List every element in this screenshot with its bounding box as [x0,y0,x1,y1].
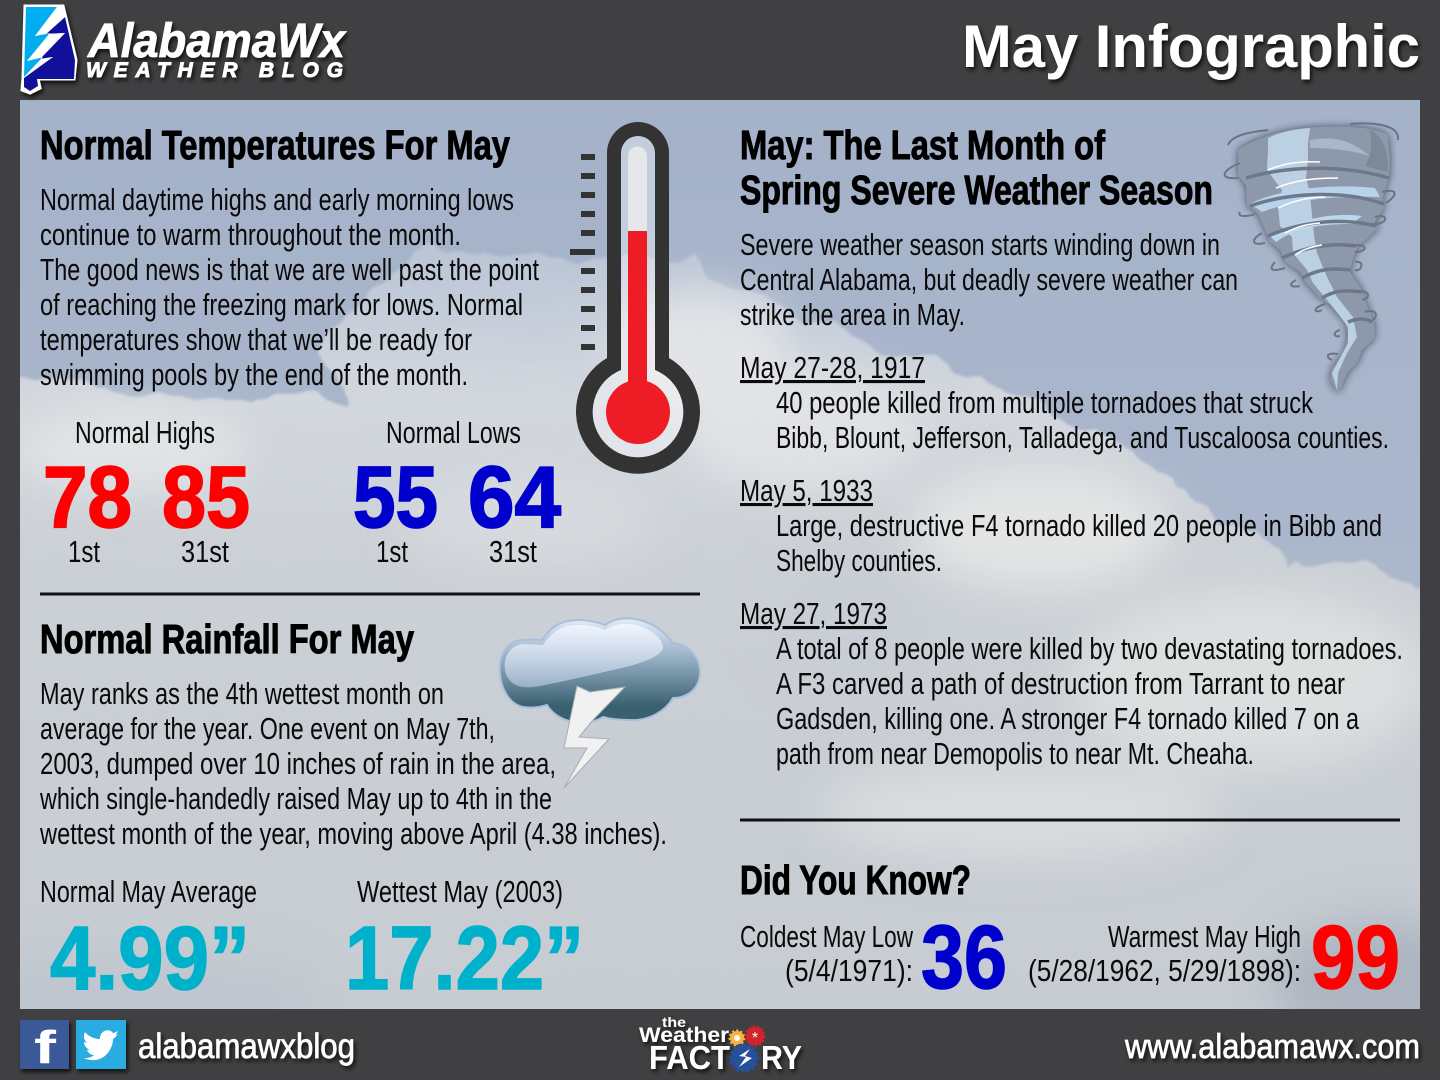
logo: The Weather Factory: FACT [649,1039,730,1076]
text block: rainfall description: 2003, dumped over 10 inches of rain in the area, [40,746,556,781]
stat: normal lows: 1st [376,534,408,569]
stat: normal lows: Normal Lows [386,415,521,450]
logo subtitle: WEATHER BLOG [86,59,343,82]
text block: temperatures description: temperatures show that we’ll be ready for [40,322,472,357]
heading: last month of severe weather season [740,122,1213,213]
stat: normal highs: 1st [68,534,100,569]
stat: normal highs: 85 [162,449,250,546]
heading: last month of severe weather season: May: The Last Month of [740,122,1105,168]
text block: rainfall description: wettest month of the year, moving above April (4.38 inches). [39,816,667,851]
stat: normal May average rainfall [40,874,257,1009]
text block: temperatures description: of reaching the freezing mark for lows. Normal [40,287,523,322]
icon: storm cloud with lightning [500,618,700,788]
text block: temperatures description: Normal daytime highs and early morning lows [40,182,514,217]
icon: twitter [76,1020,126,1069]
stat: normal lows: 31st [489,534,537,569]
icon: sun gear [730,1031,744,1045]
event: May 5, 1933: Shelby counties. [776,543,942,578]
stat: normal highs [43,415,250,569]
event: May 5, 1933: May 5, 1933 [740,473,873,508]
logo: The Weather Factory: the [662,1014,686,1030]
text block: severe weather intro: Severe weather season starts winding down in [740,227,1220,262]
stat: coldest May low: (5/4/1971): [785,953,913,988]
stat: wettest May rainfall [345,874,584,1009]
stat: warmest May high: 99 [1311,908,1400,1008]
title: May Infographic [962,13,1420,80]
stat: normal lows: 64 [468,449,561,546]
stat: normal May average rainfall: 4.99” [50,909,250,1009]
social handle: alabamawxblog [138,1027,355,1066]
stat: warmest May high: (5/28/1962, 5/29/1898): [1028,953,1301,988]
text block: severe weather intro: Central Alabama, but deadly severe weather can [740,262,1238,297]
text block: rainfall description: which single-handedly raised May up to 4th in the [39,781,552,816]
event: May 27-28, 1917 [740,350,1389,455]
logo: AlabamaWx Weather Blog [22,6,347,93]
logo: The Weather Factory [639,1014,802,1076]
stat: normal lows: 55 [353,449,438,546]
icon: lightning gear [731,1045,757,1071]
icon: snow gear [746,1027,764,1047]
stat: coldest May low: 36 [921,908,1007,1008]
text block: rainfall description: average for the year. One event on May 7th, [40,711,495,746]
stat: normal May average rainfall: Normal May Average [40,874,257,909]
icon: tornado [1225,123,1398,392]
text block: temperatures description: continue to warm throughout the month. [40,217,461,252]
heading: did you know: Did You Know? [740,857,971,903]
text block: severe weather intro [740,227,1238,332]
icon: snow gear: * [752,1030,758,1047]
stat: wettest May rainfall: Wettest May (2003) [357,874,563,909]
event: May 27, 1973 [740,596,1403,771]
stat: normal highs: Normal Highs [75,415,215,450]
text block: rainfall description [39,676,667,851]
stat: warmest May high: Warmest May High [1108,919,1301,954]
stat: normal highs: 31st [181,534,229,569]
stat: warmest May high [1028,908,1400,1008]
stat: normal highs: 78 [43,449,132,546]
event: May 27, 1973: May 27, 1973 [740,596,887,631]
heading: last month of severe weather season: Spring Severe Weather Season [740,167,1213,213]
text block: rainfall description: May ranks as the 4th wettest month on [40,676,444,711]
heading: normal rainfall: Normal Rainfall For May [40,616,414,662]
heading: normal temperatures: Normal Temperatures For May [40,122,510,168]
icon: thermometer [570,122,700,474]
stat: coldest May low [740,908,1007,1008]
text block: temperatures description [40,182,539,392]
event: May 5, 1933 [740,473,1382,578]
icon: facebook [20,1020,69,1073]
text block: temperatures description: The good news is that we are well past the point [40,252,539,287]
text block: severe weather intro: strike the area in May. [740,297,965,332]
stat: wettest May rainfall: 17.22” [345,909,584,1009]
text block: temperatures description: swimming pools by the end of the month. [40,357,468,392]
icon: facebook: f [34,1021,57,1073]
stat: normal lows [353,415,561,569]
event: May 27, 1973: path from near Demopolis to near Mt. Cheaha. [776,736,1254,771]
stat: coldest May low: Coldest May Low [740,919,913,954]
logo: The Weather Factory: Weather [639,1024,729,1047]
logo wordmark: AlabamaWx [87,15,347,68]
icon: Alabama state lightning bolt [22,6,76,93]
logo: The Weather Factory: RY [761,1039,802,1076]
event: May 27-28, 1917: May 27-28, 1917 [740,350,925,385]
